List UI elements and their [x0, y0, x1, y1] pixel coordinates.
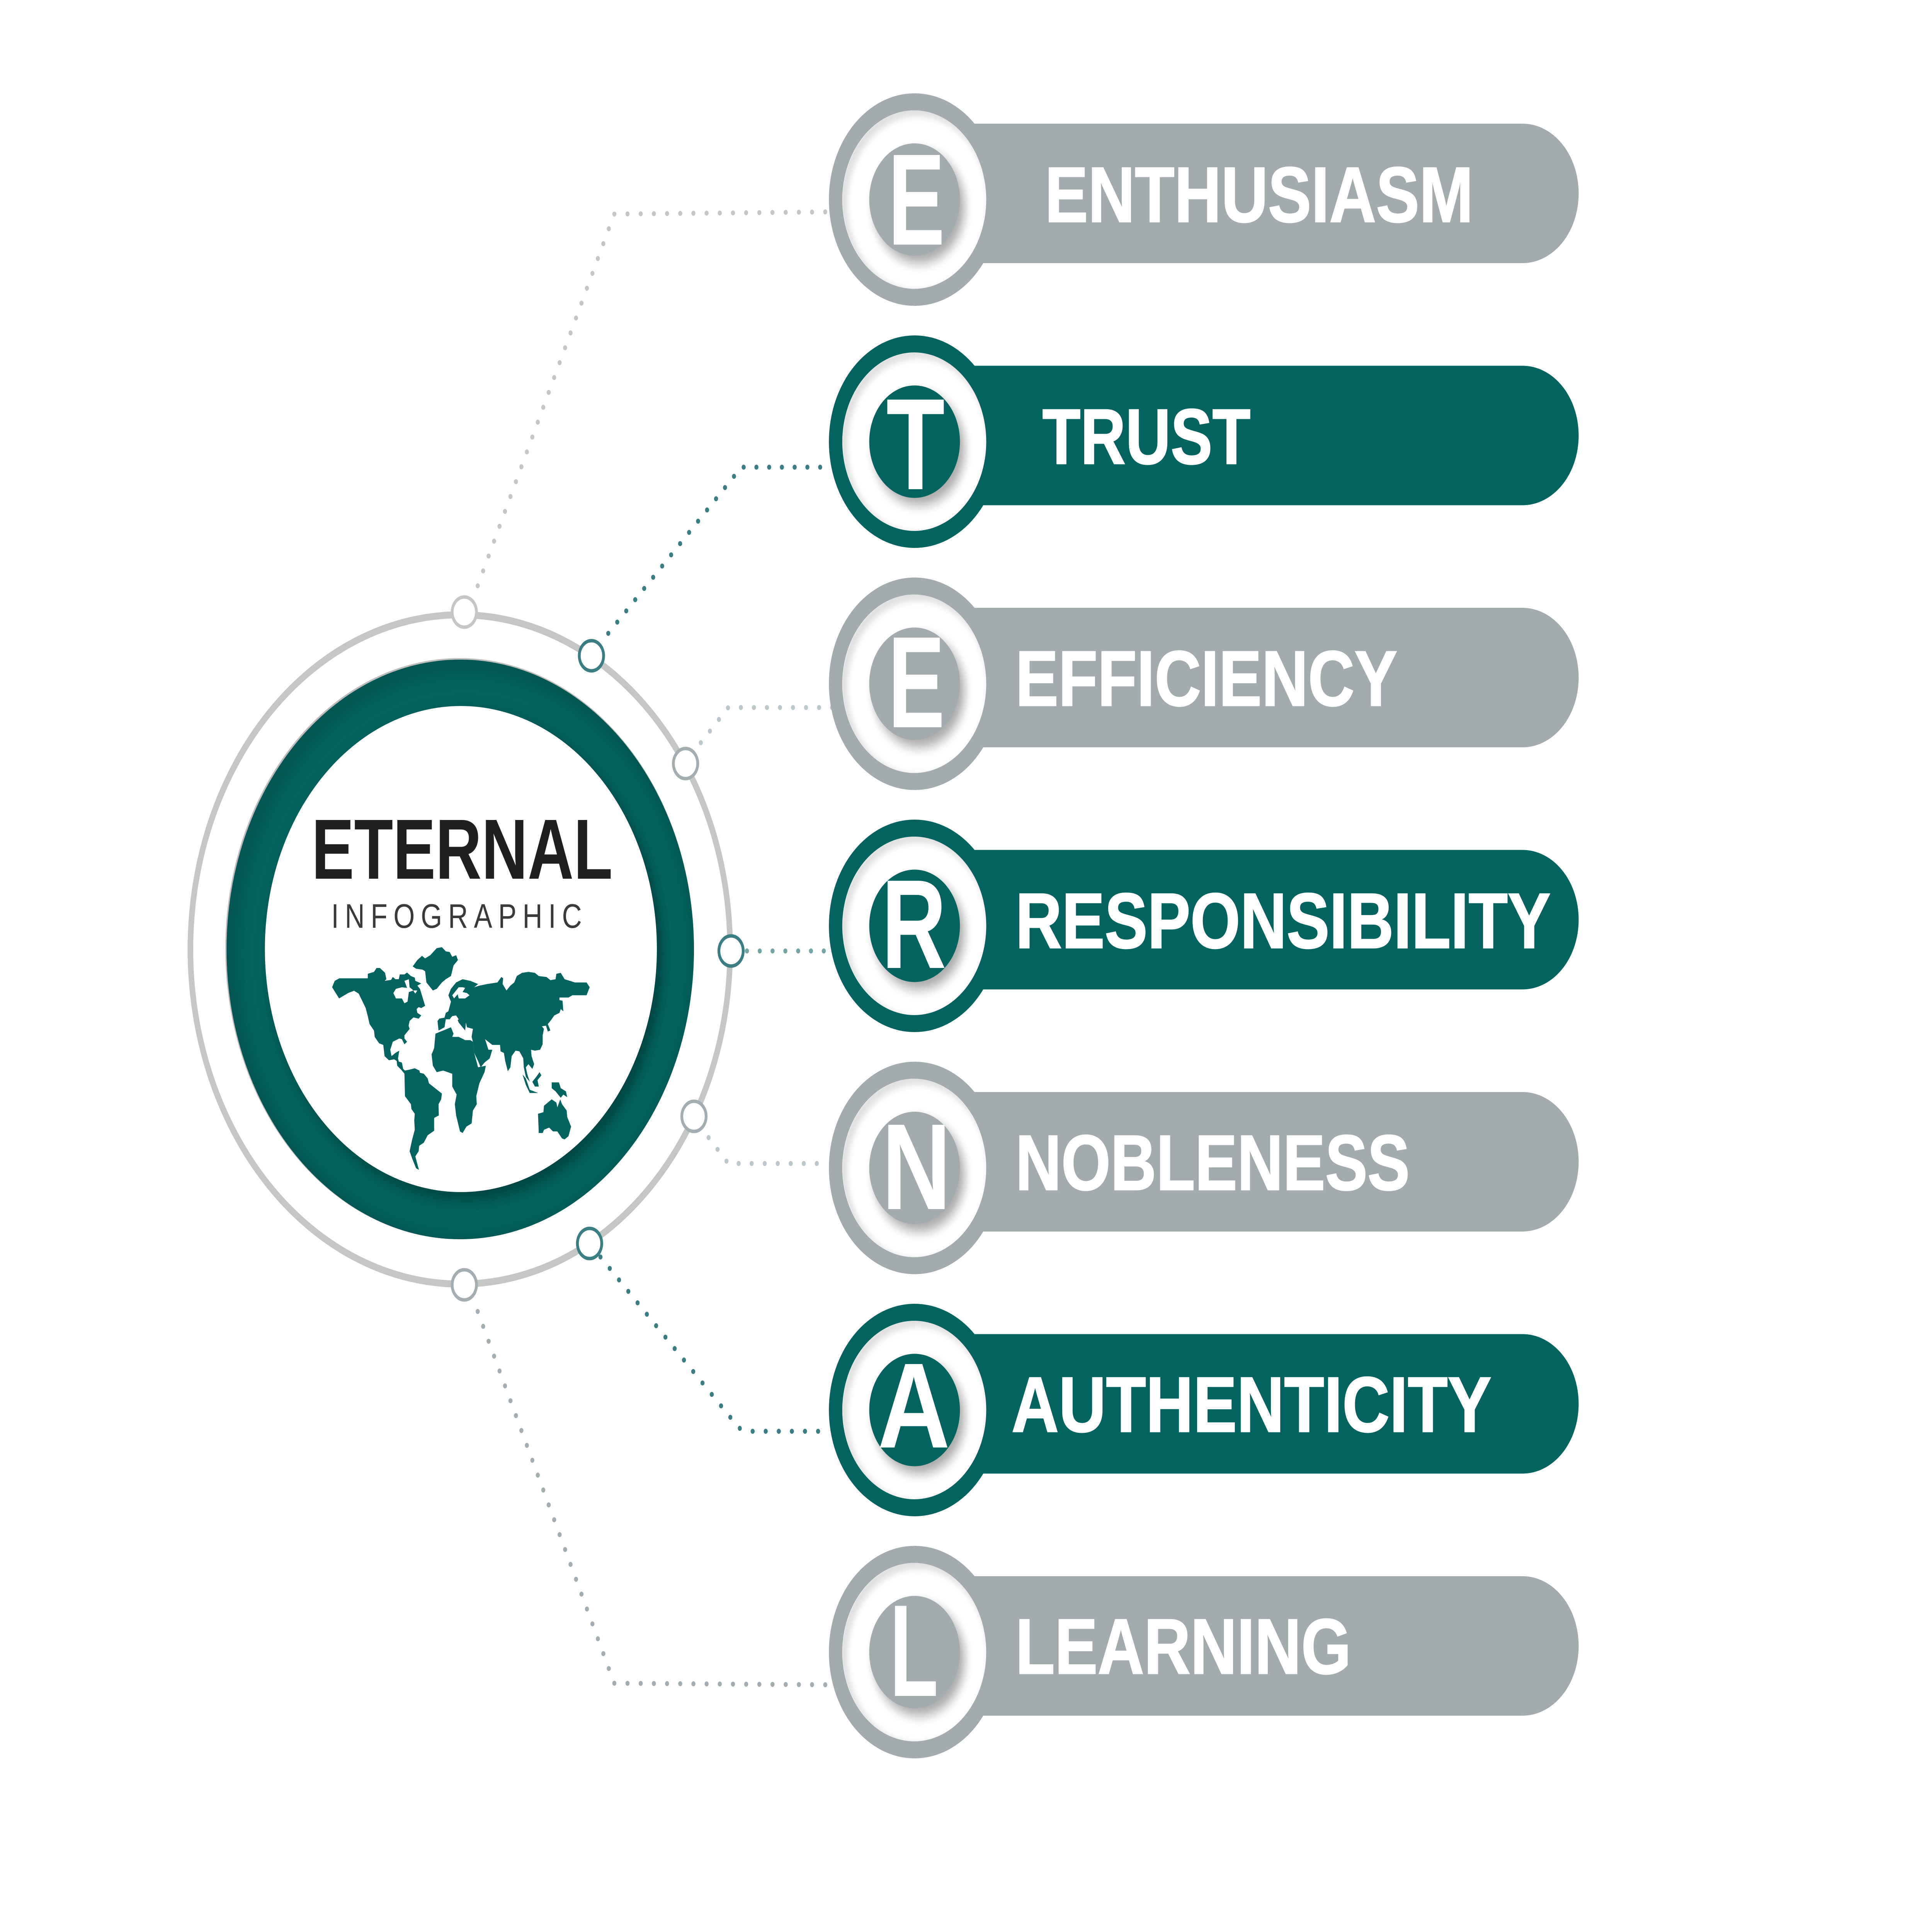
badge letter: E [888, 609, 945, 755]
row: Learning [829, 1546, 1578, 1758]
connector: centre to Enthusiasm [478, 212, 840, 586]
node: right [719, 936, 743, 966]
badge letter: L [889, 1578, 938, 1724]
badge [829, 1304, 1000, 1516]
row: Nobleness [829, 1062, 1578, 1274]
badge [829, 94, 1000, 306]
green ring [225, 658, 699, 1245]
pill [916, 124, 1578, 263]
icon: world map [332, 947, 590, 1170]
label: AUTHENTICITY [1012, 1361, 1492, 1449]
connector: centre to Learning [478, 1311, 827, 1685]
badge [829, 1546, 1000, 1758]
outer thin ring [190, 615, 730, 1284]
node: right upper [673, 748, 698, 779]
central emblem [190, 615, 730, 1284]
badge [829, 577, 1000, 790]
badge letter: A [878, 1338, 950, 1473]
badge [829, 335, 1000, 548]
node: top [452, 597, 476, 627]
label: ENTHUSIASM [1045, 151, 1473, 239]
label: RESPONSIBILITY [1015, 877, 1551, 965]
badge letter: R [881, 854, 946, 995]
row: Efficiency [829, 577, 1578, 790]
badge letter: N [882, 1099, 951, 1235]
row: Responsibility [829, 820, 1578, 1032]
pill [916, 1334, 1578, 1474]
row: Trust [829, 335, 1578, 548]
connector: centre to Nobleness [709, 1138, 823, 1163]
label: EFFICIENCY [1015, 635, 1397, 723]
connector: centre to Authenticity [600, 1257, 830, 1431]
connector: centre to Efficiency [701, 708, 835, 743]
node: lower right [577, 1228, 602, 1259]
subtitle: INFOGRAPHIC [331, 897, 582, 935]
badge letter: T [886, 371, 945, 517]
connector: centre to Responsibility [747, 948, 837, 954]
label: TRUST [1043, 393, 1250, 481]
label: LEARNING [1015, 1603, 1351, 1691]
node: bottom [452, 1270, 476, 1300]
row: Authenticity [829, 1304, 1578, 1516]
node: right lower [682, 1101, 706, 1131]
label: NOBLENESS [1015, 1119, 1410, 1207]
pill [916, 1092, 1578, 1232]
connector: centre to Trust [608, 467, 831, 633]
row: Enthusiasm [829, 94, 1578, 306]
node: upper right [579, 641, 604, 671]
badge letter: E [888, 127, 945, 272]
title: ETERNAL [311, 801, 612, 897]
pill [916, 850, 1578, 989]
pill [916, 1576, 1578, 1716]
pill [916, 366, 1578, 505]
badge [829, 1062, 1000, 1274]
badge [829, 820, 1000, 1032]
pill [916, 608, 1578, 747]
